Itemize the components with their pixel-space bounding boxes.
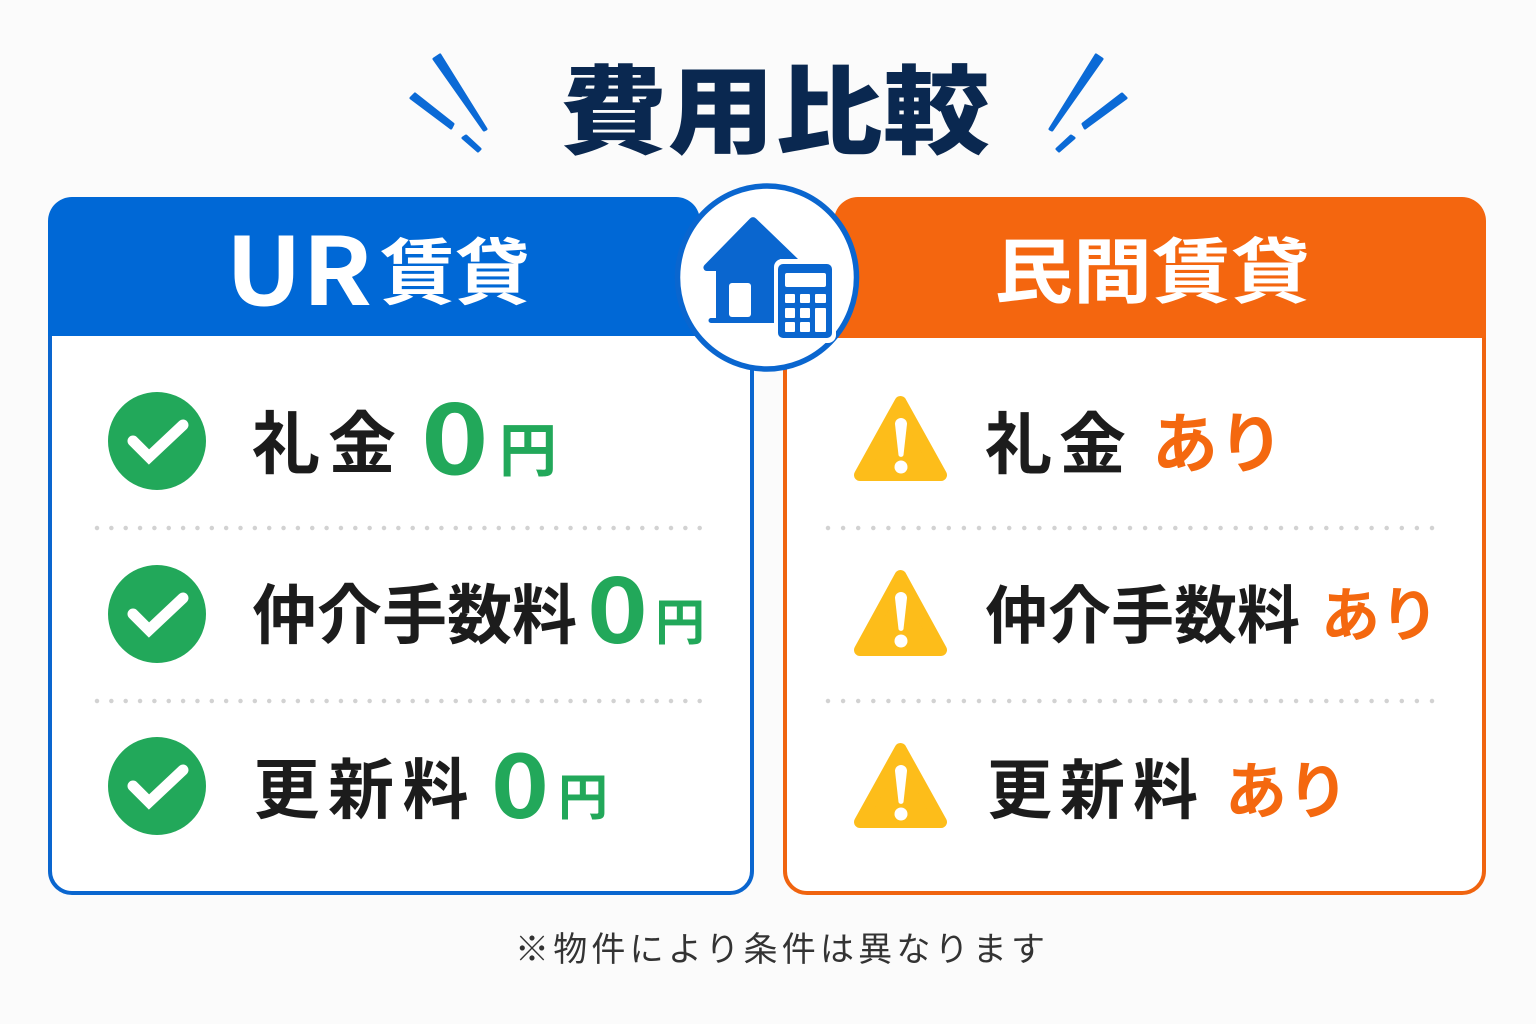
icon: house and calculator badge (678, 186, 856, 369)
label: 礼金: 礼金 (985, 391, 1133, 488)
panel body: UR (50, 300, 752, 893)
panel: UR賃貸 (48, 197, 752, 893)
panel header: 民間 (834, 197, 1486, 338)
row: 更新料 あり (860, 738, 1349, 832)
heading: UR賃貸: UR (226, 197, 372, 333)
heading: 民間賃貸: 民間賃貸 (994, 215, 1310, 318)
panel body: 民間 (785, 300, 1484, 893)
footnote: ※物件により条件は異なります (515, 922, 1045, 971)
value: 0円: 円 (499, 404, 557, 488)
row: 更新料 0円 (108, 717, 608, 843)
value: 0円 (491, 717, 608, 843)
panel header: UR (48, 197, 700, 336)
value: 0円 (421, 364, 557, 502)
value: 0円: 円 (655, 583, 705, 655)
row: 礼金 0円 (108, 364, 557, 502)
icon: right emphasis lines (1050, 55, 1126, 151)
icon: calculator (774, 259, 836, 343)
value: あり: あり (1152, 391, 1284, 487)
row: 礼金 あり (860, 391, 1284, 488)
label: 仲介手数料: 仲介手数料 (985, 566, 1300, 657)
icon: house door (729, 283, 751, 317)
icon: warning (860, 576, 941, 650)
label: 更新料: 更新料 (987, 738, 1206, 832)
label: 仲介手数料: 仲介手数料 (252, 563, 577, 657)
value: 0円: 0 (587, 540, 648, 669)
heading: UR賃貸 (226, 197, 530, 333)
title: 費用比較 (560, 35, 990, 174)
value: 0円: 円 (558, 758, 608, 830)
icon: house (703, 217, 798, 323)
value: 0円 (587, 540, 705, 669)
label: 礼金: 礼金 (252, 389, 404, 488)
icon: check (108, 737, 206, 835)
value: あり: あり (1225, 741, 1349, 831)
icon: check (108, 392, 206, 490)
icon: warning (860, 749, 941, 822)
icon: check (108, 565, 206, 663)
row: 仲介手数料 あり (860, 566, 1439, 657)
heading: UR賃貸: 賃貸 (380, 216, 530, 320)
panel: 民間賃貸 (785, 197, 1486, 893)
icon: warning (860, 402, 941, 475)
row: 仲介手数料 0円 (108, 540, 705, 669)
value: 0円: 0 (491, 717, 549, 843)
value: あり: あり (1321, 568, 1439, 653)
label: 更新料: 更新料 (254, 737, 477, 833)
icon: left emphasis lines (411, 55, 486, 151)
value: 0円: 0 (421, 364, 489, 502)
